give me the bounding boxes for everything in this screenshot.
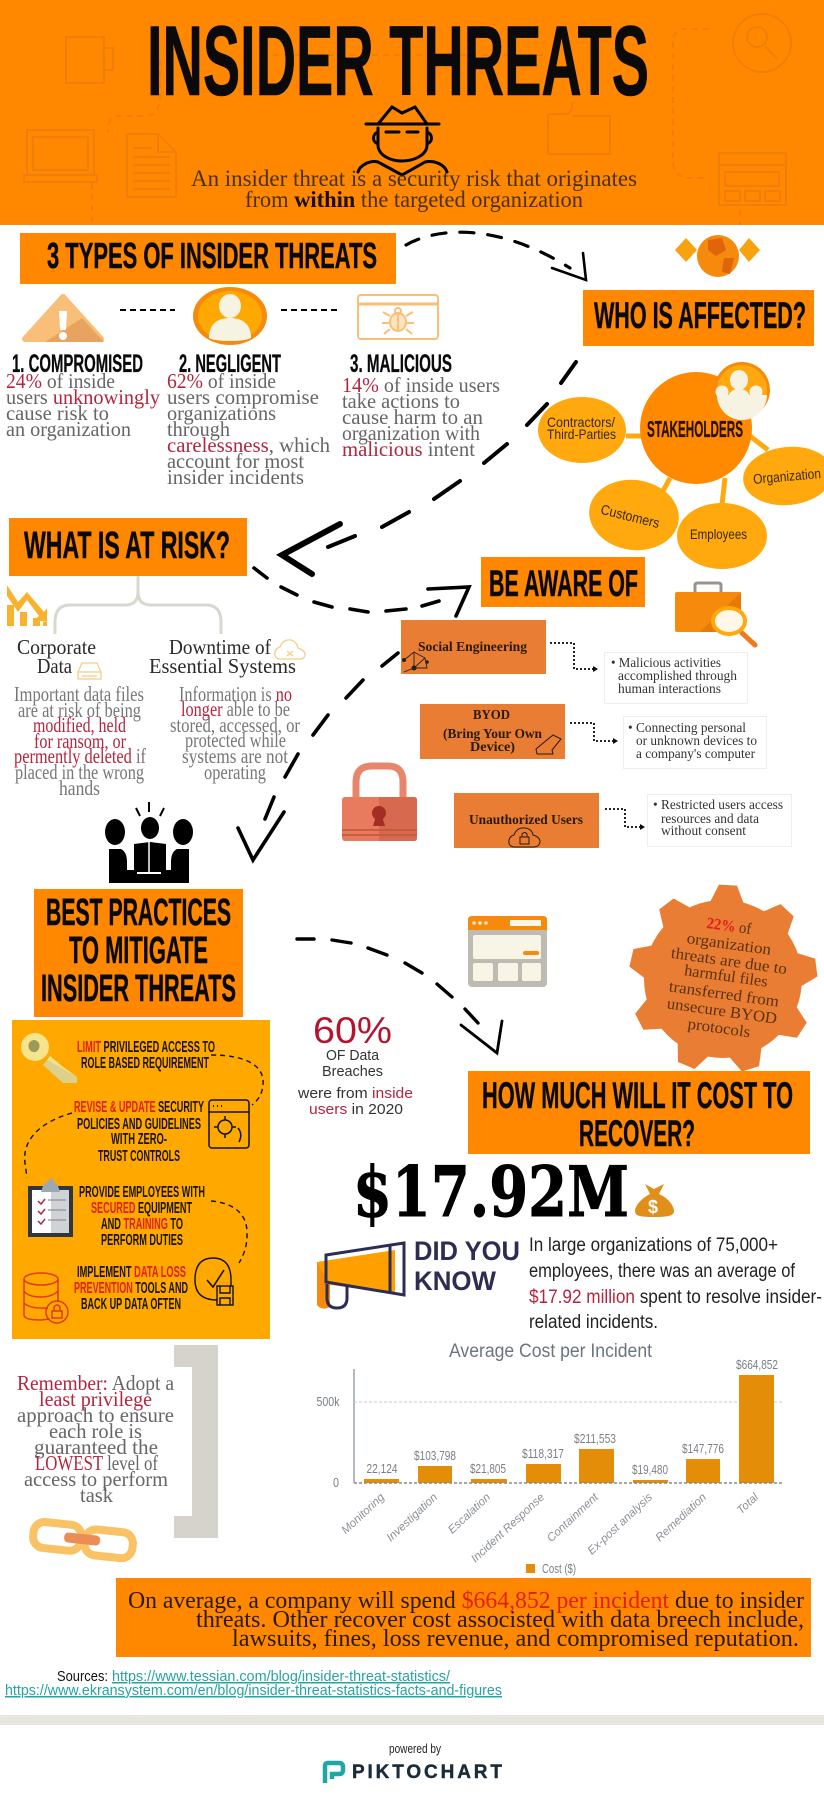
- footer band: [0, 1715, 824, 1725]
- stakeholders diagram: [538, 362, 824, 569]
- bracket: [55, 576, 221, 634]
- block: downtime: [149, 635, 305, 784]
- note: unauthorized users: [648, 794, 792, 846]
- note: social engineering: accomplished through: [618, 669, 737, 684]
- box: unauthorized users: [454, 793, 599, 848]
- block: downtime: operating: [204, 760, 266, 784]
- type 2: negligent: [167, 350, 330, 489]
- block: corporate data: hands: [59, 776, 100, 800]
- icon: check and floppy: [195, 1258, 233, 1305]
- stat: 60%: users in 2020: [309, 1101, 403, 1118]
- callout: per incident cost: On average, a company will spend $664,852 per incident due to insider: [128, 1588, 804, 1614]
- gear callout: transferred from: [668, 978, 781, 1011]
- panel: practices: [12, 1020, 270, 1339]
- icon: gear browser: [209, 1100, 249, 1148]
- icon: money bag: $: [648, 1197, 658, 1217]
- practice: revise: TRUST CONTROLS: [98, 1148, 180, 1165]
- text: large organizations: In large organizations of 75,000+: [529, 1235, 778, 1256]
- heading: cost to recover: RECOVER?: [579, 1113, 695, 1154]
- practice: revise: [74, 1099, 204, 1165]
- practice: implement: IMPLEMENT DATA LOSS: [77, 1264, 186, 1281]
- practice: implement: BACK UP DATA OFTEN: [81, 1296, 181, 1313]
- stakeholders diagram: Contractors/: [547, 414, 615, 430]
- type 3: malicious: [342, 350, 500, 461]
- text: remember: task: [80, 1483, 113, 1507]
- icon: browser window: [468, 916, 547, 987]
- practice: implement: [74, 1264, 188, 1313]
- type 1: compromised: 24% of inside: [6, 369, 115, 393]
- block: downtime: Essential Systems: [149, 654, 296, 678]
- type 3: malicious: take actions to: [342, 389, 460, 413]
- type 2: negligent: organizations: [167, 401, 276, 425]
- box: BYOD: Device): [470, 740, 515, 755]
- heading: be aware of: BE AWARE OF: [489, 563, 638, 604]
- bar chart: Total: [735, 1491, 761, 1517]
- text: remember: [17, 1371, 175, 1507]
- bar chart: Escalation: [446, 1491, 493, 1536]
- icon: megaphone: [317, 1243, 404, 1309]
- bar chart: Ex-post analysis: [586, 1491, 655, 1557]
- type 3: malicious: 14% of inside users: [342, 373, 500, 397]
- stat: 60%: Breaches: [322, 1063, 383, 1080]
- dashes between types: [120, 309, 337, 311]
- gear callout: organization: [686, 930, 772, 959]
- text: remember: approach to ensure: [17, 1403, 174, 1427]
- text: remember: guaranteed the: [34, 1435, 158, 1459]
- practice: revise: REVISE & UPDATE SECURITY: [74, 1099, 204, 1116]
- powered by logo: powered by: [389, 1741, 441, 1756]
- heading: best practices: [34, 889, 243, 1017]
- note: social engineering: human interactions: [618, 682, 721, 697]
- icon: briefcase: [675, 583, 755, 645]
- block: corporate data: Corporate: [17, 635, 96, 659]
- heading: cost to recover: [468, 1071, 810, 1154]
- block: downtime: longer able to be: [181, 697, 290, 721]
- type 2: negligent: through: [167, 417, 230, 441]
- bar chart: 500k: [316, 1395, 340, 1409]
- practice: limit: ROLE BASED REQUIREMENT: [81, 1055, 209, 1072]
- callout: per incident cost: threats. Other recover cost associsted with data breech include,: [196, 1607, 804, 1633]
- note: unauthorized users: • Restricted users access: [653, 798, 783, 813]
- did you know: KNOW: [414, 1266, 496, 1296]
- type 2: negligent: users compromise: [167, 385, 319, 409]
- heading: 3 types: 3 TYPES OF INSIDER THREATS: [47, 235, 377, 276]
- block: corporate data: Data: [37, 654, 73, 678]
- practice: provide: AND TRAINING TO: [101, 1216, 183, 1233]
- powered by logo: [325, 1741, 502, 1783]
- icon: chain: [32, 1521, 134, 1559]
- gear callout: unsecure BYOD: [666, 995, 778, 1028]
- bar chart: Monitoring: [340, 1491, 387, 1537]
- stat: 60%: OF Data: [326, 1047, 380, 1064]
- arrow: affected to risk: [282, 362, 576, 574]
- did you know: [414, 1236, 520, 1296]
- big number: $17.92M: [353, 1152, 629, 1233]
- heading: what is at risk: [9, 518, 247, 576]
- heading: be aware of: [481, 557, 645, 607]
- bar chart: 22,124: [366, 1462, 398, 1476]
- dotted arrow 3: [605, 809, 645, 830]
- stakeholders diagram: Third-Parties: [547, 426, 616, 442]
- note: BYOD: a company's computer: [636, 747, 755, 762]
- arrow: aware to practices: [238, 653, 398, 860]
- callout: per incident cost: [116, 1578, 811, 1657]
- bar chart: Cost ($): [542, 1562, 576, 1576]
- text: remember: each role is: [49, 1419, 142, 1443]
- gear callout: [628, 884, 818, 1074]
- block: downtime: systems are not: [182, 744, 288, 768]
- practice: provide: PROVIDE EMPLOYEES WITH: [79, 1184, 205, 1201]
- note: BYOD: or unknown devices to: [636, 734, 757, 749]
- practice: revise: WITH ZERO-: [111, 1131, 167, 1148]
- sources: [5, 1668, 502, 1699]
- bar chart: $103,798: [414, 1449, 456, 1463]
- icon: meeting people: [105, 802, 193, 883]
- box: unauthorized users: Unauthorized Users: [469, 813, 584, 828]
- bar chart: $211,553: [574, 1432, 616, 1446]
- block: corporate data: placed in the wrong: [15, 760, 144, 784]
- type 2: negligent: carelessness, which: [167, 433, 330, 457]
- text: remember: Remember: Adopt a: [17, 1371, 175, 1395]
- icon: padlock: [342, 766, 417, 841]
- gear callout: harmful files: [683, 962, 769, 991]
- bar chart: Containment: [545, 1491, 602, 1545]
- icon: database: [24, 1273, 68, 1323]
- intro text: [191, 166, 637, 212]
- stakeholders diagram: Employees: [690, 526, 747, 542]
- bar chart: Average Cost per Incident: [449, 1341, 653, 1362]
- box: social engineering: [401, 620, 546, 674]
- sources: Sources:: [57, 1668, 108, 1685]
- type 1: compromised: [6, 350, 160, 441]
- note: BYOD: • Connecting personal: [628, 721, 746, 736]
- bar chart: $118,317: [522, 1447, 564, 1461]
- sources: https://www.ekransystem.com/en/blog/insider-threat-statistics-facts-and-figures: [5, 1682, 502, 1699]
- callout: per incident cost: lawsuits, fines, loss revenue, and compromised reputation.: [232, 1626, 799, 1652]
- block: corporate data: modified, held: [33, 713, 126, 737]
- bar chart: Incident Response: [469, 1491, 547, 1565]
- practice: limit: [77, 1039, 215, 1072]
- text: remember: LOWEST level of: [35, 1451, 158, 1475]
- heading: 3 types: [20, 233, 396, 284]
- icon: clipboard: [28, 1178, 73, 1237]
- powered by logo: PIKTOCHART: [352, 1762, 502, 1783]
- text: large organizations: [529, 1235, 822, 1333]
- bar chart: Investigation: [385, 1491, 440, 1544]
- heading: best practices: INSIDER THREATS: [41, 968, 236, 1010]
- stat: 60%: were from inside: [297, 1085, 413, 1102]
- stat: 60%: 60%: [313, 1010, 392, 1051]
- text: remember: access to perform: [24, 1467, 168, 1491]
- block: corporate data: [14, 635, 146, 800]
- block: downtime: stored, accessed, or: [170, 713, 300, 737]
- type 2: negligent: 2. NEGLIGENT: [179, 350, 281, 378]
- box: social engineering: Social Engineering: [418, 640, 527, 655]
- bar chart: $147,776: [682, 1442, 724, 1456]
- type 2: negligent: account for most: [167, 449, 304, 473]
- block: corporate data: are at risk of being: [18, 698, 141, 722]
- box: BYOD: (Bring Your Own: [443, 727, 542, 742]
- bar chart: $19,480: [632, 1463, 668, 1477]
- heading: best practices: BEST PRACTICES: [46, 892, 231, 934]
- block: corporate data: permently deleted if: [14, 744, 146, 768]
- type 3: malicious: malicious intent: [342, 437, 475, 461]
- stakeholders diagram: Customers: [599, 501, 661, 531]
- icon: person circle: [193, 287, 267, 345]
- icon: globe: [675, 235, 760, 277]
- note: BYOD: [624, 716, 766, 768]
- note: social engineering: • Malicious activities: [611, 656, 721, 671]
- note: unauthorized users: without consent: [661, 824, 746, 839]
- icon: bug browser: [358, 295, 438, 339]
- type 1: compromised: cause risk to: [6, 401, 109, 425]
- block: corporate data: for ransom, or: [34, 729, 126, 753]
- gear callout: threats are due to: [670, 945, 788, 978]
- bar chart: $664,852: [736, 1358, 778, 1372]
- type 3: malicious: organization with: [342, 421, 480, 445]
- icon: money bag: [635, 1184, 674, 1217]
- type 1: compromised: users unknowingly: [6, 385, 160, 409]
- heading: who is affected: [583, 290, 814, 346]
- heading: what is at risk: WHAT IS AT RISK?: [24, 525, 230, 567]
- practice: revise: POLICIES AND GUIDELINES: [77, 1116, 201, 1133]
- icon: warning triangle: [25, 297, 104, 342]
- intro text: An insider threat is a security risk that originates: [191, 166, 637, 191]
- block: downtime: protected while: [185, 728, 286, 752]
- dotted arrow 1: [550, 643, 598, 672]
- bar chart: $21,805: [470, 1462, 506, 1476]
- icon: falling chart: [7, 585, 47, 626]
- practice: provide: PERFORM DUTIES: [101, 1232, 183, 1249]
- dotted arrow 2: [570, 723, 618, 744]
- text: remember: least privilege: [39, 1387, 152, 1411]
- practice: limit: LIMIT PRIVILEGED ACCESS TO: [77, 1039, 215, 1056]
- type 2: negligent: insider incidents: [167, 465, 304, 489]
- gear callout: protocols: [687, 1016, 751, 1041]
- arrow: risk to aware: [254, 568, 469, 616]
- stat: 60%: [297, 1010, 413, 1118]
- text: large organizations: related incidents.: [529, 1312, 658, 1333]
- block: downtime: Downtime of: [169, 635, 271, 659]
- bar chart: Remediation: [654, 1491, 709, 1544]
- heading: best practices: TO MITIGATE: [69, 930, 208, 972]
- icon: key: [21, 1033, 77, 1083]
- practice: implement: PREVENTION TOOLS AND: [74, 1280, 188, 1297]
- box: BYOD: BYOD: [473, 708, 510, 723]
- practice: provide: SECURED EQUIPMENT: [91, 1200, 192, 1217]
- bar chart: [316, 1341, 783, 1576]
- type 2: negligent: 62% of inside: [167, 369, 276, 393]
- arrow: types to affected: [406, 232, 586, 280]
- box: BYOD: [420, 704, 565, 759]
- block: downtime: Information is no: [179, 682, 292, 706]
- note: unauthorized users: resources and data: [661, 812, 760, 827]
- practice: provide: [79, 1184, 205, 1249]
- gear callout: 22% of: [705, 915, 753, 938]
- did you know: DID YOU: [414, 1236, 520, 1266]
- type 1: compromised: 1. COMPROMISED: [12, 350, 143, 378]
- sources: https://www.tessian.com/blog/insider-threat-statistics/: [112, 1668, 451, 1685]
- bar chart: 0: [333, 1476, 339, 1490]
- type 3: malicious: 3. MALICIOUS: [350, 350, 452, 378]
- header banner: [0, 0, 824, 225]
- icon: hacker: [358, 107, 447, 175]
- block: corporate data: Important data files: [14, 682, 144, 706]
- arrow: practices to cost: [297, 939, 502, 1053]
- intro text: from within the targeted organization: [245, 187, 583, 212]
- type 3: malicious: cause harm to an: [342, 405, 483, 429]
- gray bracket: [174, 1345, 218, 1538]
- type 1: compromised: an organization: [6, 417, 131, 441]
- note: social engineering: [604, 652, 748, 704]
